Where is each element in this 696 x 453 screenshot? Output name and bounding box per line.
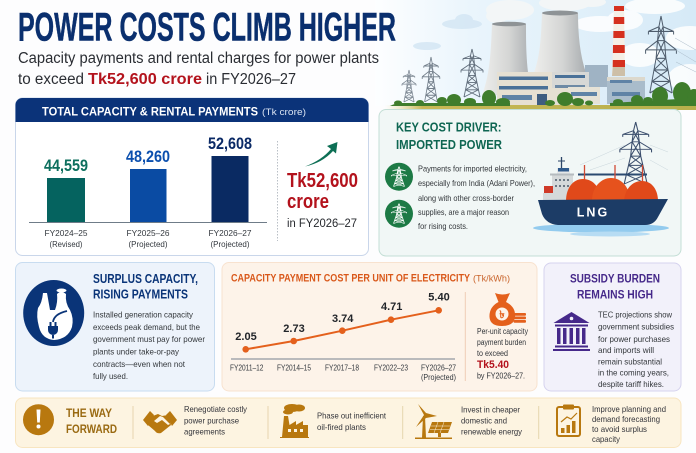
line chart: 2.05 [235,331,257,343]
text block: imported power: along with other cross-border [418,193,514,203]
subtitle: in FY2026–27 [206,71,296,88]
panel: the way forward [16,398,681,448]
panel heading [570,272,660,302]
text: renegotiate: power purchase [184,416,239,426]
text block: subsidy: remain substantial [598,357,662,367]
way forward heading: THE WAY [66,408,112,420]
panel heading: IMPORTED POWER [396,137,503,152]
bar chart: FY2024–25 [44,229,88,238]
text: improve planning [592,404,666,444]
text block: subsidy: in the coming years, [598,368,669,378]
bar chart: 48,260 [126,148,170,166]
panel heading: SUBSIDY BURDEN [570,272,660,286]
way forward heading: FORWARD [66,424,117,436]
callout: Tk52,600 crore: Tk52,600 [287,170,358,192]
panel: surplus capacity [16,262,214,391]
icon: clipboard chart [557,404,580,436]
panel heading: CAPACITY PAYMENT COST PER UNIT OF ELECTRICITY [231,272,471,284]
panel heading: (Tk crore) [262,107,306,118]
icon: wind turbine and solar panel [415,404,452,439]
panel heading: REMAINS HIGH [577,288,653,302]
text: improve planning: demand forecasting [592,414,660,424]
text block: imported power: for rising costs. [418,221,468,231]
panel: key cost driver [379,110,681,256]
title: POWER COSTS CLIMB HIGHER [18,6,396,50]
bar chart: (Revised) [50,240,83,249]
text: phase out: Phase out inefficient [317,411,387,421]
line chart: FY2022–23 [374,363,408,372]
icon: rising arrow [305,142,338,166]
panel heading: RISING PAYMENTS [93,288,188,302]
panel heading: KEY COST DRIVER: [396,120,502,134]
panel heading: TOTAL CAPACITY & RENTAL PAYMENTS [42,104,258,118]
icon: power plant plug badge [23,280,84,346]
callout: per-unit burden: Tk5.40 [477,359,509,371]
text: renegotiate: Renegotiate costly [184,404,248,414]
icon: striped chimney [612,6,625,76]
text: improve planning: Improve planning and [592,404,666,414]
trees [390,82,696,106]
icon: money bag and coins [489,293,526,326]
text block: subsidy: for power purchases [598,334,670,344]
callout: per-unit burden: payment burden [477,338,526,347]
line chart [230,292,456,382]
text: improve planning: to avoid surplus [592,424,647,434]
text block: surplus: Installed generation capacity [93,309,194,319]
text block: imported power: Payments for imported electricity, [418,164,527,174]
icon: exclamation badge [23,404,54,435]
bar chart: (Projected) [210,240,250,249]
illustration: power plant skyline [375,0,696,110]
panel heading: (Tk/kWh) [473,274,510,284]
panel header [16,98,368,122]
bar chart: FY2026–27 [208,229,252,238]
line chart: (Projected) [421,373,456,382]
panel: total capacity and rental payments [16,98,368,256]
callout: per-unit burden: by FY2026–27. [477,372,525,381]
text block: imported power: especially from India (Adani Power), [418,178,535,188]
icon: cooling towers [482,10,586,95]
pylon: right large [646,16,676,93]
line chart: 3.74 [332,313,354,325]
line chart: 4.71 [381,301,402,313]
bar chart: 52,608 [208,135,252,153]
line chart: FY2014–15 [277,363,311,372]
text block: subsidy: TEC projections show [598,309,673,319]
text: invest: domestic and [461,416,507,426]
panel: subsidy burden [544,263,681,391]
icon: government building [553,312,590,351]
bar chart: FY2025–26 [126,229,170,238]
bar chart: 44,559 [44,157,88,175]
text: improve planning: capacity [592,434,621,444]
text: renegotiate [184,404,248,437]
callout: Tk52,600 crore: crore [287,191,329,213]
text: invest: renewable energy [461,427,523,437]
callout: Tk52,600 crore: in FY2026–27 [287,218,357,230]
bar chart: (Projected) [128,240,168,249]
icon: LNG tanker with pylon [533,122,669,236]
pylon: second left [422,57,440,102]
text: phase out [317,411,387,432]
callout: per-unit burden [477,327,528,381]
icon: money bag and coins: ৳ [499,309,505,321]
subtitle: Capacity payments and rental charges for power plants [18,50,379,67]
text block: surplus: government must pay for power [93,334,205,344]
text block: imported power [418,164,535,231]
line chart: FY2017–18 [325,363,359,372]
text: invest [461,404,523,437]
callout: per-unit burden: Per-unit capacity [477,327,528,336]
panel heading [396,120,503,152]
text: invest: Invest in cheaper [461,404,520,414]
text block: surplus: contracts—even when not [93,359,186,369]
text: phase out: oil-fired plants [317,422,366,432]
pylon: third left [461,49,483,97]
line chart: 2.73 [283,323,305,335]
text block: surplus: fully used. [93,371,128,381]
line chart: FY2026–27 [421,363,456,372]
bar chart [29,135,267,249]
panel: capacity payment per unit [222,262,537,391]
callout: Tk52,600 crore [287,170,358,230]
panel heading: SURPLUS CAPACITY, [93,272,198,286]
way forward heading [66,408,117,436]
icon: factory with smoke [280,404,309,438]
panel heading [93,272,198,302]
line chart: FY2011–12 [230,363,264,372]
icon: LNG tanker with pylon: LNG [577,206,609,220]
text block: subsidy: government subsidies [598,322,674,332]
text block: imported power: supplies, are a major reason [418,207,509,217]
subtitle: Tk52,600 crore [88,71,202,88]
ground strip [385,105,696,110]
icon: pylon badge two [385,200,413,228]
line chart: 5.40 [428,292,450,304]
callout: per-unit burden: to exceed [477,349,508,358]
text block: subsidy: despite tariff hikes. [598,379,664,389]
pylon: small left [402,70,416,102]
text: renegotiate: agreements [184,427,225,437]
icon: plant buildings [497,65,645,105]
text block: subsidy [598,309,674,389]
text block: surplus: plants under take-or-pay [93,346,180,356]
icon: pylon badge one [385,163,413,191]
icon: handshake [143,411,177,433]
subtitle [18,50,379,88]
text block: subsidy: and imports will [598,345,654,355]
text block: surplus: exceeds peak demand, but the [93,322,200,332]
text block: surplus [93,309,205,381]
subtitle: to exceed [18,71,84,88]
